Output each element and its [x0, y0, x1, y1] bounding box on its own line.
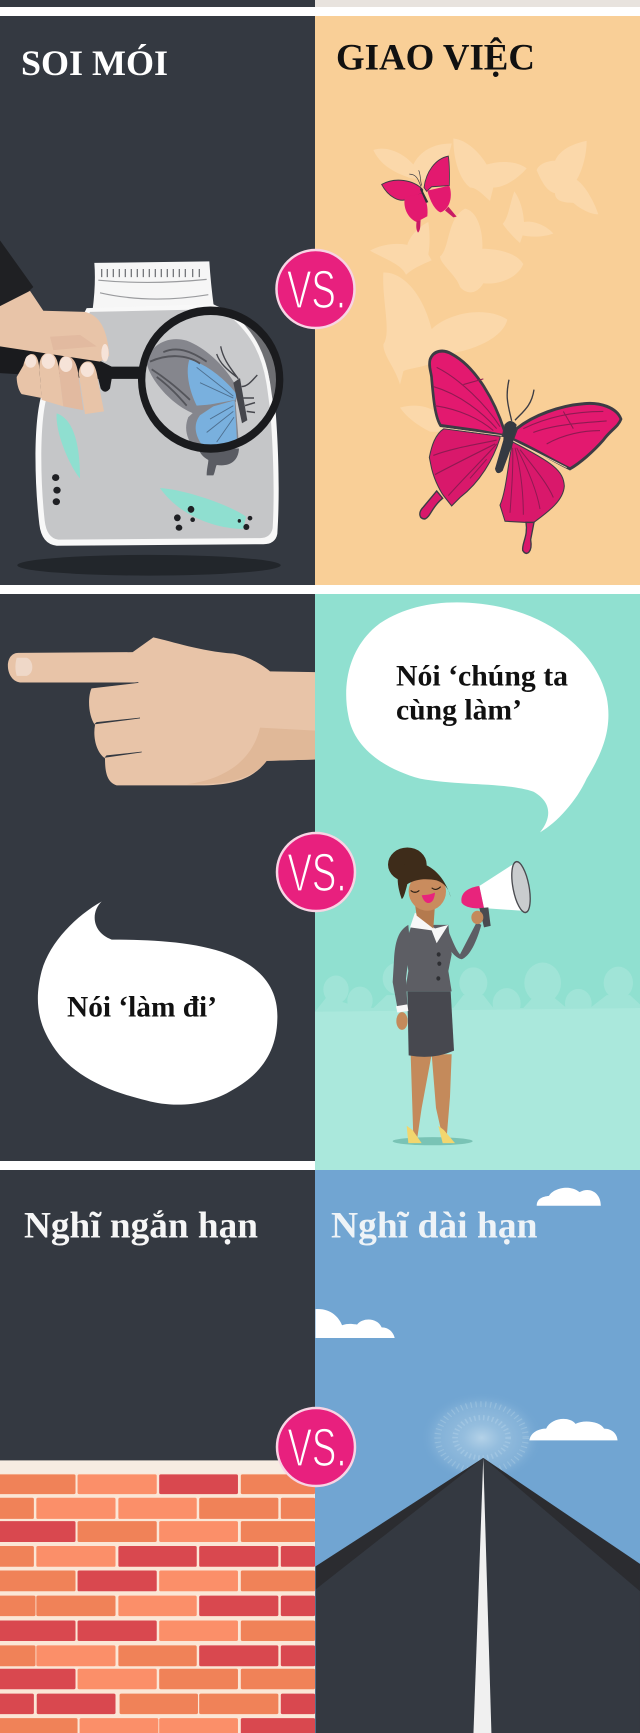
megaphone	[479, 863, 527, 911]
badge: VS row 1	[276, 250, 354, 328]
skirt	[407, 991, 454, 1057]
jar body	[35, 304, 279, 546]
jacket buttons	[436, 952, 441, 981]
leaf left	[57, 413, 80, 478]
heading: SOI MÓI: SOI MÓI	[21, 43, 168, 83]
mist	[420, 1392, 543, 1483]
cuff	[396, 1004, 408, 1012]
speech bubble: chúng ta cùng làm	[346, 602, 608, 832]
jar lid	[93, 261, 214, 309]
shadow	[393, 1137, 473, 1145]
ghost butterflies	[370, 139, 598, 432]
panel: giao viec (right, row 1)	[315, 16, 640, 585]
heading: Nghĩ dài hạn: Nghĩ dài hạn	[331, 1206, 538, 1246]
magnifier handle	[0, 344, 142, 392]
hair	[388, 847, 451, 899]
butterfly tail outside lens	[198, 449, 239, 475]
magnified butterfly	[147, 339, 257, 453]
cloud right	[529, 1419, 618, 1440]
small pink butterfly	[382, 156, 457, 233]
illustration: jar with magnifier and hand	[0, 240, 287, 576]
panel: road and sky (right, row 3)	[315, 1170, 640, 1733]
legs	[411, 1054, 432, 1138]
droppings	[52, 474, 252, 531]
neck and face	[415, 904, 435, 929]
badge: VS row 2	[277, 833, 355, 911]
sleeve	[0, 240, 33, 318]
leaf bottom	[160, 488, 246, 529]
panel: woman with megaphone (right, row 2)	[315, 594, 640, 1170]
hand	[396, 1012, 408, 1030]
magnifier ring	[142, 311, 280, 449]
text: Nói ‘làm đi’: Nói ‘làm đi’	[67, 992, 217, 1024]
jacket	[393, 922, 481, 1007]
cloud top	[537, 1188, 601, 1206]
panel: pointing hand and speech bubble (left, row 2)	[0, 594, 315, 1161]
woman with megaphone	[388, 847, 534, 1145]
mouth	[422, 893, 435, 903]
panel: soi moi (left, row 1)	[0, 16, 315, 585]
heading: GIAO VIỆC: GIAO VIỆC	[336, 36, 535, 78]
heading: Nghĩ ngắn hạn: Nghĩ ngắn hạn	[24, 1206, 258, 1246]
hand holding magnifier	[0, 291, 109, 414]
jar shadow	[17, 555, 281, 576]
icon: pointing hand	[8, 637, 315, 785]
road	[316, 1458, 640, 1733]
cloud left	[316, 1309, 395, 1338]
badge: VS row 1: VS.	[287, 260, 346, 320]
text: Nói ‘chúng ta cùng làm’: cùng làm’	[396, 694, 522, 726]
badge: VS row 2: VS.	[288, 843, 346, 903]
text: Nói ‘chúng ta cùng làm’	[396, 660, 568, 726]
brick wall	[0, 1460, 315, 1733]
top strip	[0, 0, 640, 7]
text: Nói ‘chúng ta cùng làm’: Nói ‘chúng ta	[396, 660, 568, 692]
lens view	[147, 316, 276, 444]
heels	[407, 1126, 455, 1143]
illustration: butterflies	[370, 139, 621, 553]
panel: brick wall (left, row 3)	[0, 1170, 315, 1733]
badge: VS row 3: VS.	[288, 1418, 346, 1478]
collar	[410, 913, 448, 943]
speech bubble: làm đi	[38, 902, 277, 1105]
badge: VS row 3	[277, 1408, 355, 1486]
crowd silhouette	[315, 963, 640, 1170]
large pink butterfly	[420, 351, 621, 553]
